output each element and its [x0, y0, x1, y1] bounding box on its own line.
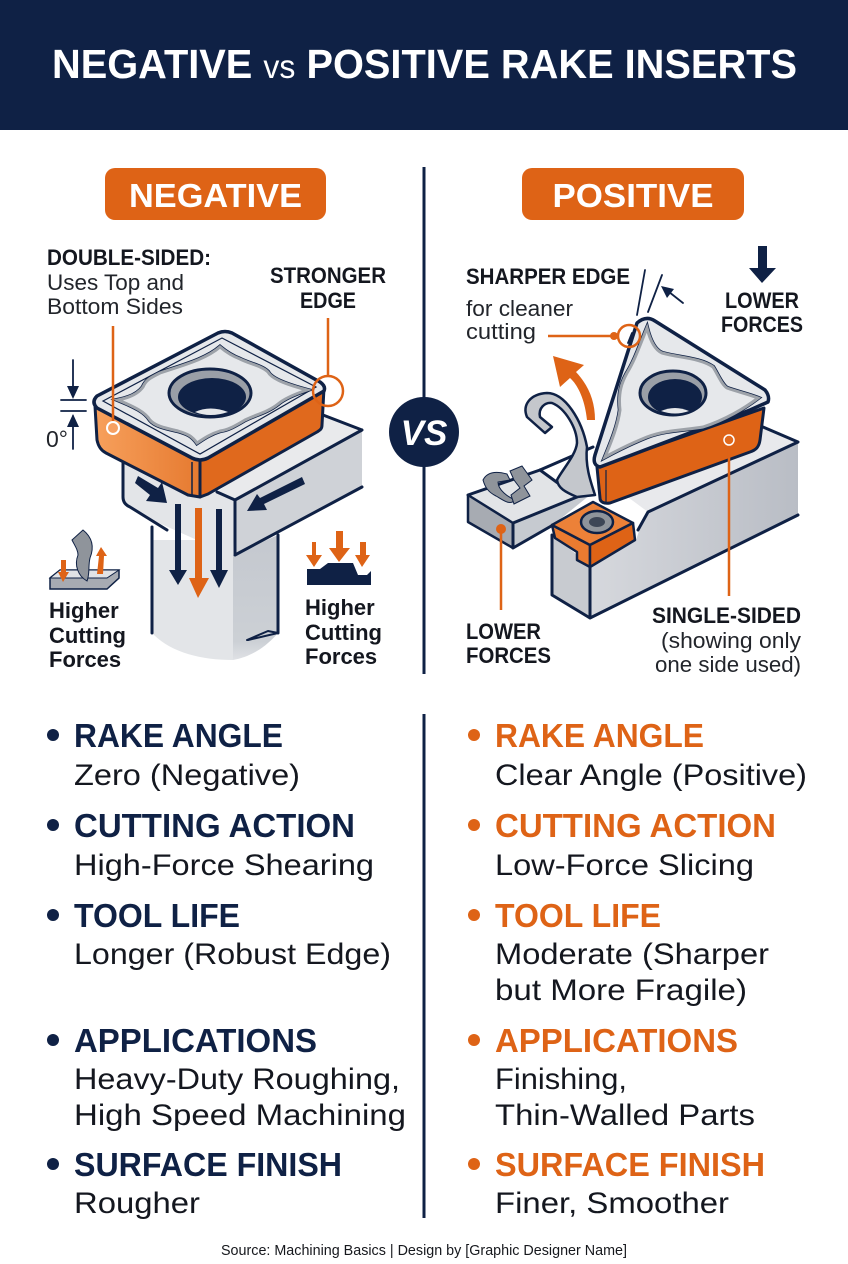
- callout: sharper edge: cutting: [466, 319, 536, 344]
- item: applications: APPLICATIONS: [495, 1022, 738, 1059]
- item: cutting action: Low-Force Slicing: [495, 849, 754, 882]
- item: applications: Thin-Walled Parts: [495, 1099, 755, 1132]
- item: cutting action: High-Force Shearing: [74, 849, 374, 882]
- item: tool life: Longer (Robust Edge): [74, 938, 391, 971]
- curled chip: [526, 393, 595, 497]
- item: cutting action: CUTTING ACTION: [495, 807, 776, 844]
- illustration: positive insert on holder: [468, 318, 798, 618]
- vs badge: [389, 397, 459, 467]
- chip breaker groove: [118, 347, 307, 443]
- label: higher cutting forces left: Forces: [49, 647, 121, 672]
- badge: negative: NEGATIVE: [129, 177, 302, 214]
- callout: single-sided: (showing only: [661, 628, 801, 653]
- item: tool life: but More Fragile): [495, 974, 747, 1007]
- label: higher cutting forces right: Higher: [305, 595, 375, 620]
- title banner: [0, 0, 848, 130]
- list: positive properties: [468, 717, 807, 1220]
- illustration: negative insert on holder: [94, 332, 362, 660]
- clamp: [552, 525, 590, 567]
- title banner: NEGATIVE vs POSITIVE RAKE INSERTS: [52, 41, 797, 87]
- center hole: [640, 371, 706, 415]
- item: rake angle: Clear Angle (Positive): [495, 759, 807, 792]
- callout: sharper edge: [466, 264, 640, 347]
- item: applications: [47, 1022, 406, 1132]
- badge: positive: [522, 168, 744, 220]
- tool body left face: [552, 535, 590, 618]
- item: tool life: TOOL LIFE: [495, 897, 661, 934]
- item: surface finish: SURFACE FINISH: [74, 1146, 342, 1183]
- item: applications: Finishing,: [495, 1063, 627, 1096]
- workpiece: [468, 470, 577, 523]
- label: higher cutting forces left: Cutting: [49, 623, 126, 648]
- item: rake angle: RAKE ANGLE: [495, 717, 704, 754]
- item: surface finish: Finer, Smoother: [495, 1187, 729, 1220]
- item: applications: APPLICATIONS: [74, 1022, 317, 1059]
- arrow: chip flow: [553, 356, 595, 420]
- label: higher cutting forces right: Cutting: [305, 620, 382, 645]
- annotation: zero degree: 0°: [46, 426, 68, 452]
- label: higher cutting forces left: Higher: [49, 598, 119, 623]
- arrow and label: lower forces top: FORCES: [721, 312, 803, 337]
- annotation: positive rake angle lines: [628, 270, 683, 343]
- center hole: [169, 369, 251, 417]
- item: rake angle: RAKE ANGLE: [74, 717, 283, 754]
- list: negative properties: [47, 717, 406, 1220]
- item: surface finish: [47, 1146, 342, 1220]
- small chips: [483, 472, 515, 503]
- shank: [152, 515, 233, 660]
- callout: stronger edge: [270, 263, 386, 406]
- icon: downward forces on part: [306, 531, 371, 585]
- item: applications: High Speed Machining: [74, 1099, 406, 1132]
- holder right block: [235, 430, 362, 555]
- item: surface finish: [468, 1146, 765, 1220]
- item: tool life: [468, 897, 769, 1007]
- holder left block: [123, 463, 235, 556]
- callout: stronger edge: STRONGER: [270, 263, 386, 288]
- badge: negative: [105, 168, 326, 220]
- item: cutting action: CUTTING ACTION: [74, 807, 355, 844]
- insert orange left face: [95, 406, 200, 497]
- tool body top face: [625, 427, 798, 512]
- callout: stronger edge: EDGE: [300, 288, 356, 313]
- icon: chip and forces: [50, 530, 119, 589]
- callout: double-sided: Bottom Sides: [47, 294, 183, 319]
- callout: lower forces bottom: FORCES: [466, 643, 551, 668]
- item: cutting action: [468, 807, 776, 882]
- callout: double-sided: DOUBLE-SIDED:: [47, 245, 211, 270]
- item: tool life: TOOL LIFE: [74, 897, 240, 934]
- label: higher cutting forces left: [49, 598, 126, 672]
- arrow and label: lower forces top: LOWER: [725, 288, 799, 313]
- arrow and label: lower forces top: [721, 246, 803, 337]
- item: rake angle: [468, 717, 807, 792]
- insert top face: [594, 318, 769, 467]
- insert orange side: [597, 408, 764, 503]
- annotation: zero degree: [46, 360, 86, 452]
- item: applications: Heavy-Duty Roughing,: [74, 1063, 400, 1096]
- item: cutting action: [47, 807, 374, 882]
- item: tool life: Moderate (Sharper: [495, 938, 769, 971]
- label: higher cutting forces right: Forces: [305, 644, 377, 669]
- item: rake angle: [47, 717, 300, 792]
- item: applications: [468, 1022, 755, 1132]
- callout: lower forces bottom: [466, 524, 551, 668]
- holder top surface: [217, 415, 362, 500]
- callout: single-sided: [652, 435, 801, 677]
- item: rake angle: Zero (Negative): [74, 759, 300, 792]
- callout: double-sided: [47, 245, 211, 434]
- badge: positive: POSITIVE: [552, 177, 714, 214]
- insert top face: [94, 332, 324, 460]
- callout: double-sided: Uses Top and: [47, 270, 184, 295]
- item: surface finish: Rougher: [74, 1187, 200, 1220]
- callout: sharper edge: for cleaner: [466, 296, 573, 321]
- item: surface finish: SURFACE FINISH: [495, 1146, 765, 1183]
- callout: single-sided: SINGLE-SIDED: [652, 603, 801, 628]
- source footer: Source: Machining Basics | Design by [Graphic Designer Name]: [221, 1243, 627, 1259]
- tool body front face: [590, 442, 798, 618]
- item: tool life: [47, 897, 391, 971]
- insert orange right face: [200, 388, 324, 497]
- callout: single-sided: one side used): [655, 652, 801, 677]
- vs badge: VS: [401, 414, 447, 453]
- callout: lower forces bottom: LOWER: [466, 619, 541, 644]
- chip breaker groove: [605, 328, 758, 457]
- label: higher cutting forces right: [305, 595, 382, 669]
- force arrows on holder: [135, 476, 167, 503]
- callout: sharper edge: SHARPER EDGE: [466, 264, 630, 289]
